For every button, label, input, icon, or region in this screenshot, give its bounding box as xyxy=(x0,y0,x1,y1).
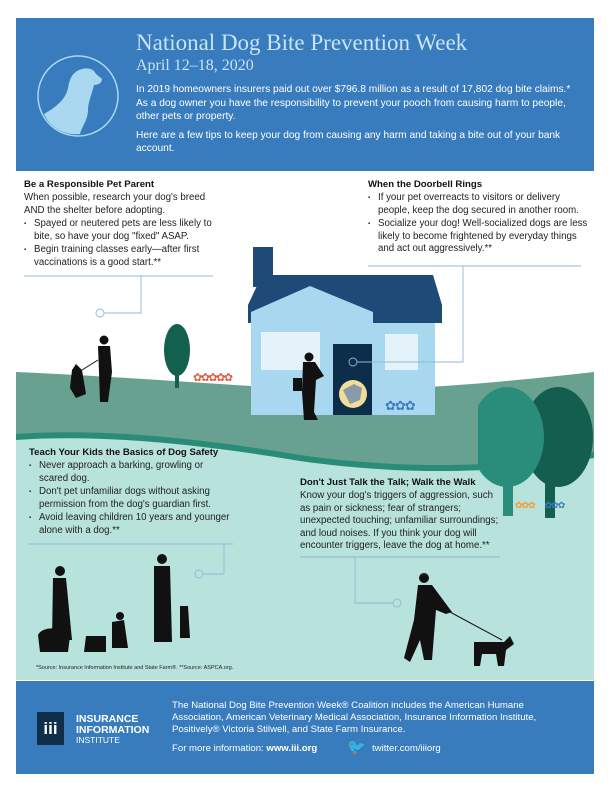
section: walk the walk: Know your dog's triggers of aggression, such as pain or sickness; fear of strangers; unexpected touching; unfamiliar surroundings; and loud noises. If you think your dog will encounter triggers, leave the dog at home.** xyxy=(300,490,498,551)
section: responsible pet parent xyxy=(24,179,212,268)
section: teach kids xyxy=(29,447,230,536)
mail carrier xyxy=(304,352,314,362)
woman and dogs xyxy=(55,566,65,576)
man with cat xyxy=(157,554,167,564)
small tree left xyxy=(164,324,190,388)
section: teach kids: Don't pet unfamiliar dogs without asking permission from the dog's guardian first. xyxy=(39,486,211,510)
title: National Dog Bite Prevention Week xyxy=(136,30,467,55)
flowers blue: ✿✿✿ xyxy=(385,398,415,413)
flowers orange and blue: ✿✿✿ ✿✿✿ xyxy=(515,500,564,510)
section: doorbell xyxy=(368,179,587,254)
section: teach kids: Teach Your Kids the Basics of Dog Safety xyxy=(29,447,218,458)
flowers red: ✿✿✿✿✿ xyxy=(193,372,232,384)
footnote: *Source: Insurance Information Institute and State Farm®. **Source: ASPCA.org. xyxy=(36,665,233,671)
date: April 12–18, 2020 xyxy=(136,57,254,74)
intro text: In 2019 homeowners insurers paid out over $796.8 million as a result of 17,802 dog bite claims.* As a dog owner you have the responsibility to prevent your pooch from causing harm to people, other pets or property. xyxy=(136,84,570,122)
coalition text: The National Dog Bite Prevention Week® Coalition includes the American Humane Association, American Veterinary Medical Association, Insurance Information Institute, Positively® Victoria Stilwell, and State Farm Insurance. xyxy=(172,700,536,735)
section: responsible pet parent: When possible, research your dog's breed AND the shelter before adopting. xyxy=(24,192,205,216)
footer panel: twitter.com/iiiorg xyxy=(372,743,441,754)
footer panel: INFORMATION xyxy=(76,724,149,736)
section: responsible pet parent: Spayed or neutered pets are less likely to bite, so have your dog "fixed" ASAP. xyxy=(34,218,212,242)
section: responsible pet parent: Begin training classes early—after first vaccinations is a good start.** xyxy=(34,244,199,268)
intro text xyxy=(136,84,570,154)
links: For more information: www.iii.org xyxy=(172,743,317,754)
trees right xyxy=(478,387,593,518)
icon: dog in circle xyxy=(37,55,119,137)
icon: twitter: 🐦 xyxy=(347,739,366,756)
section: teach kids: Never approach a barking, growling or scared dog. xyxy=(39,460,203,484)
logo xyxy=(37,712,64,745)
section: walk the walk: Don't Just Talk the Talk; Walk the Walk xyxy=(300,477,476,488)
footer panel xyxy=(16,681,594,774)
intro text: Here are a few tips to keep your dog from causing any harm and taking a bite out of your bank account. xyxy=(136,130,560,154)
child xyxy=(116,612,124,620)
section: doorbell: Socialize your dog! Well-socialized dogs are less likely to become frightened by everyday things and act out aggressively.** xyxy=(378,218,587,254)
footer panel: INSURANCE xyxy=(76,713,138,725)
section: doorbell: When the Doorbell Rings xyxy=(368,179,482,190)
section: doorbell: If your pet overreacts to visitors or delivery people, keep the dog secured in another room. xyxy=(378,192,579,216)
walker xyxy=(419,573,429,583)
section: teach kids: Avoid leaving children 10 years and younger alone with a dog.** xyxy=(39,512,229,536)
footer panel: INSTITUTE xyxy=(76,735,120,745)
logo: iii xyxy=(43,719,58,738)
section: responsible pet parent: Be a Responsible Pet Parent xyxy=(24,179,154,190)
man with dog xyxy=(100,336,108,344)
house xyxy=(248,247,442,415)
header panel xyxy=(16,18,594,171)
